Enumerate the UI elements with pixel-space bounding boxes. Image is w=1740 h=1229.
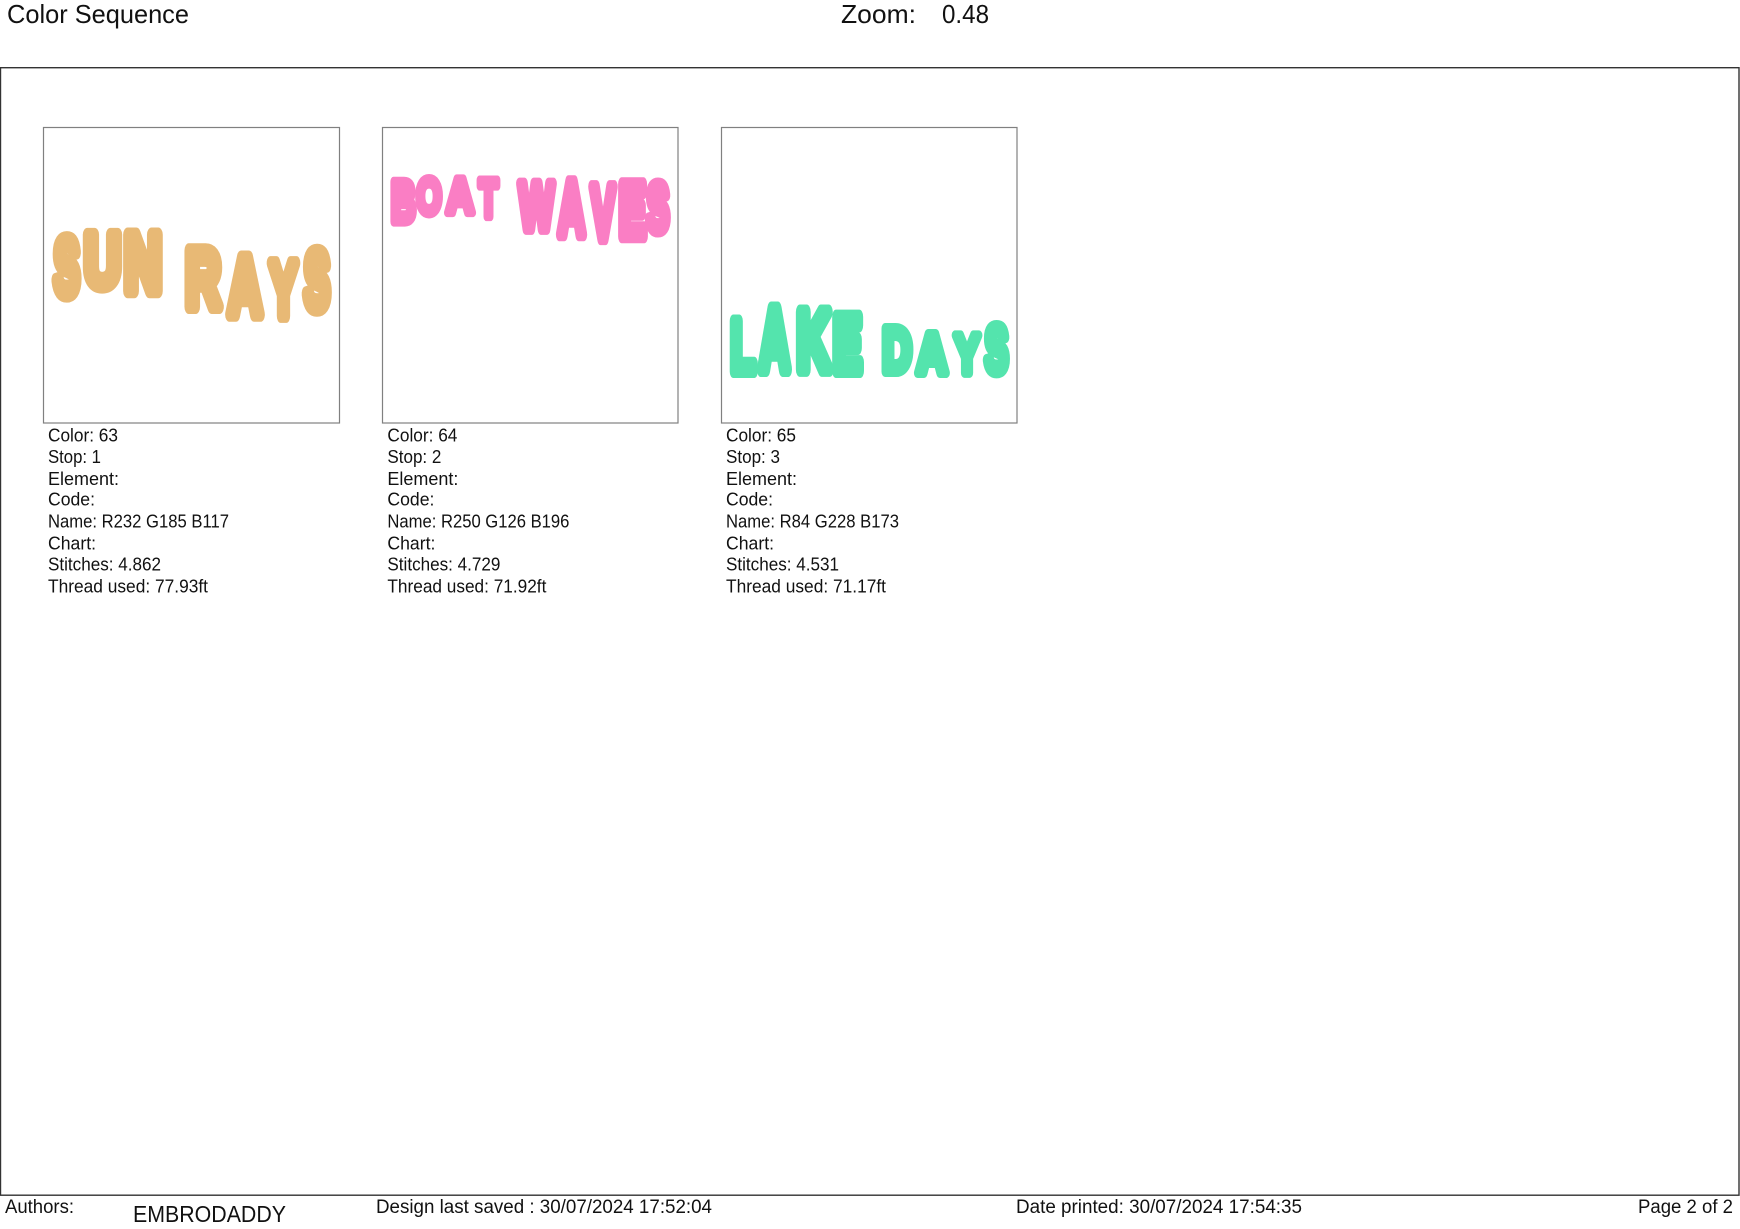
authors label: Authors: (5, 1197, 74, 1218)
artwork: boat waves (391, 166, 669, 255)
details: color 65: Stitches: 4.531 (726, 554, 839, 575)
details: color 64 (387, 425, 569, 596)
details: color 63: Thread used: 77.93ft (48, 575, 208, 596)
artwork: sun rays: R (185, 234, 221, 325)
artwork: boat waves: B (391, 170, 415, 235)
author name: EMBRODADDY (133, 1201, 286, 1227)
details: color 65: Thread used: 71.17ft (726, 575, 886, 596)
artwork: lake days: E (833, 299, 862, 388)
artwork: boat waves: A (558, 166, 585, 251)
artwork: lake days (731, 291, 1008, 389)
artwork: lake days: S (985, 313, 1008, 387)
artwork: boat waves: T (479, 170, 498, 229)
page number: Page 2 of 2 (1638, 1197, 1733, 1218)
details: color 65: Name: R84 G228 B173 (726, 510, 899, 531)
panel: color stop 3 (722, 128, 1017, 596)
details: color 65: Chart: (726, 532, 774, 554)
details: color 64: Element: (387, 468, 458, 489)
details: color 64: Chart: (387, 532, 435, 554)
date printed: Date printed: 30/07/2024 17:54:35 (1016, 1197, 1302, 1218)
thumbnail frame 1 (44, 128, 340, 423)
details: color 64: Thread used: 71.92ft (387, 575, 546, 596)
artwork: boat waves: O (417, 168, 441, 224)
details: color 65: Stop: 3 (726, 446, 780, 467)
artwork: boat waves: V (591, 172, 615, 255)
details: color 63: Stitches: 4.862 (48, 554, 161, 575)
artwork: lake days: Y (954, 323, 980, 385)
details: color 63: Chart: (48, 532, 96, 554)
details: color 63 (48, 425, 229, 596)
details: color 65: Color: 65 (726, 425, 796, 446)
artwork: boat waves: E (619, 168, 646, 253)
footer (5, 1197, 1733, 1227)
details: color 63: Stop: 1 (48, 446, 101, 467)
details: color 64: Code: (387, 489, 434, 510)
artwork: boat waves: S (647, 170, 669, 246)
artwork: lake days: A (917, 322, 947, 385)
artwork: boat waves: A (446, 169, 474, 224)
panel: color stop 1 (44, 128, 340, 596)
artwork: sun rays: N (124, 218, 162, 309)
artwork: lake days: K (797, 295, 830, 388)
details: color 63: Name: R232 G185 B117 (48, 510, 229, 531)
details: color 64: Name: R250 G126 B196 (387, 510, 569, 531)
details: color 63: Code: (48, 489, 95, 510)
details: color 65 (726, 425, 899, 596)
artwork: lake days: D (882, 316, 912, 386)
artwork: lake days: A (760, 291, 789, 389)
artwork: sun rays: Y (270, 248, 297, 334)
artwork: sun rays: U (84, 218, 121, 303)
details: color 63: Element: (48, 468, 119, 489)
thumbnail frame 2 (382, 128, 678, 423)
panel: color stop 2 (382, 128, 678, 596)
artwork: lake days: L (731, 305, 755, 388)
artwork: sun rays: S (304, 235, 330, 327)
artwork: sun rays: A (228, 241, 262, 333)
details: color 63: Color: 63 (48, 425, 118, 446)
details: color 65: Element: (726, 468, 797, 489)
design last saved: Design last saved : 30/07/2024 17:52:04 (376, 1197, 712, 1218)
artwork: sun rays: S (54, 223, 80, 312)
thumbnail frame 3 (722, 128, 1017, 423)
details: color 64: Stop: 2 (387, 446, 441, 467)
artwork: boat waves: W (519, 171, 554, 244)
artwork: sun rays (54, 218, 330, 334)
details: color 64: Color: 64 (387, 425, 457, 446)
details: color 65: Code: (726, 489, 773, 510)
details: color 64: Stitches: 4.729 (387, 554, 500, 575)
